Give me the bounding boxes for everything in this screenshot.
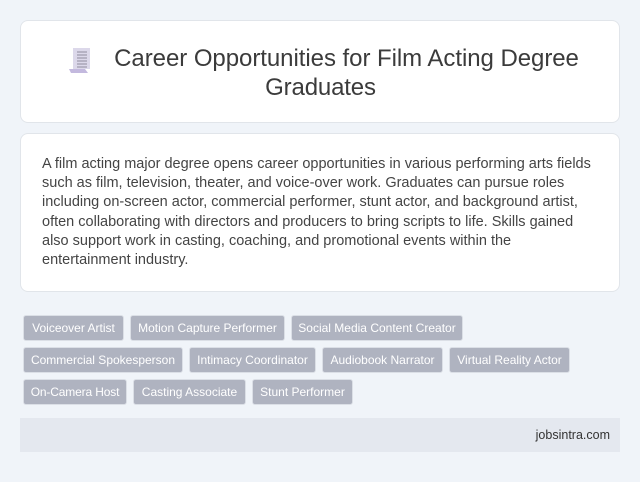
tag (23, 379, 127, 405)
footer source text: jobsintra.com (536, 428, 610, 442)
title second line: Graduates (265, 74, 376, 101)
tag (130, 315, 285, 341)
footer bar (20, 418, 620, 452)
tag (449, 347, 570, 373)
tag: On-Camera Host (31, 385, 119, 399)
tag: Voiceover Artist (32, 321, 115, 335)
tag: Casting Associate (142, 385, 237, 399)
tag: Commercial Spokesperson (31, 353, 175, 367)
panel: title header (20, 20, 620, 123)
tag (133, 379, 246, 405)
tag (189, 347, 316, 373)
title: Career Opportunities for Film Acting Degree (114, 45, 579, 72)
panel: description text (20, 133, 620, 292)
panel: description text: such as film, television, theater, and voice-over work. Graduates can pursue roles (42, 175, 564, 191)
tag: Virtual Reality Actor (457, 353, 562, 367)
tag (252, 379, 353, 405)
tag (23, 347, 183, 373)
panel: description text: entertainment industry. (42, 252, 188, 268)
tag (23, 315, 124, 341)
icon: document scroll (69, 48, 90, 73)
tag (322, 347, 443, 373)
tag: Audiobook Narrator (330, 353, 435, 367)
panel: description text: often collaborating with directors and producers to bring scripts to life. Skills gained (42, 214, 573, 230)
tag: Motion Capture Performer (138, 321, 277, 335)
tag: Stunt Performer (260, 385, 345, 399)
panel: description text: also support work in casting, coaching, and promotional events within the (42, 233, 511, 249)
panel: description text: including on-screen actor, commercial performer, stunt actor, and background artist, (42, 194, 578, 210)
panel: description text: A film acting major degree opens career opportunities in various performing arts fields (42, 156, 591, 172)
tags: career roles (23, 315, 570, 405)
tag (291, 315, 463, 341)
tag: Intimacy Coordinator (197, 353, 308, 367)
tag: Social Media Content Creator (298, 321, 456, 335)
